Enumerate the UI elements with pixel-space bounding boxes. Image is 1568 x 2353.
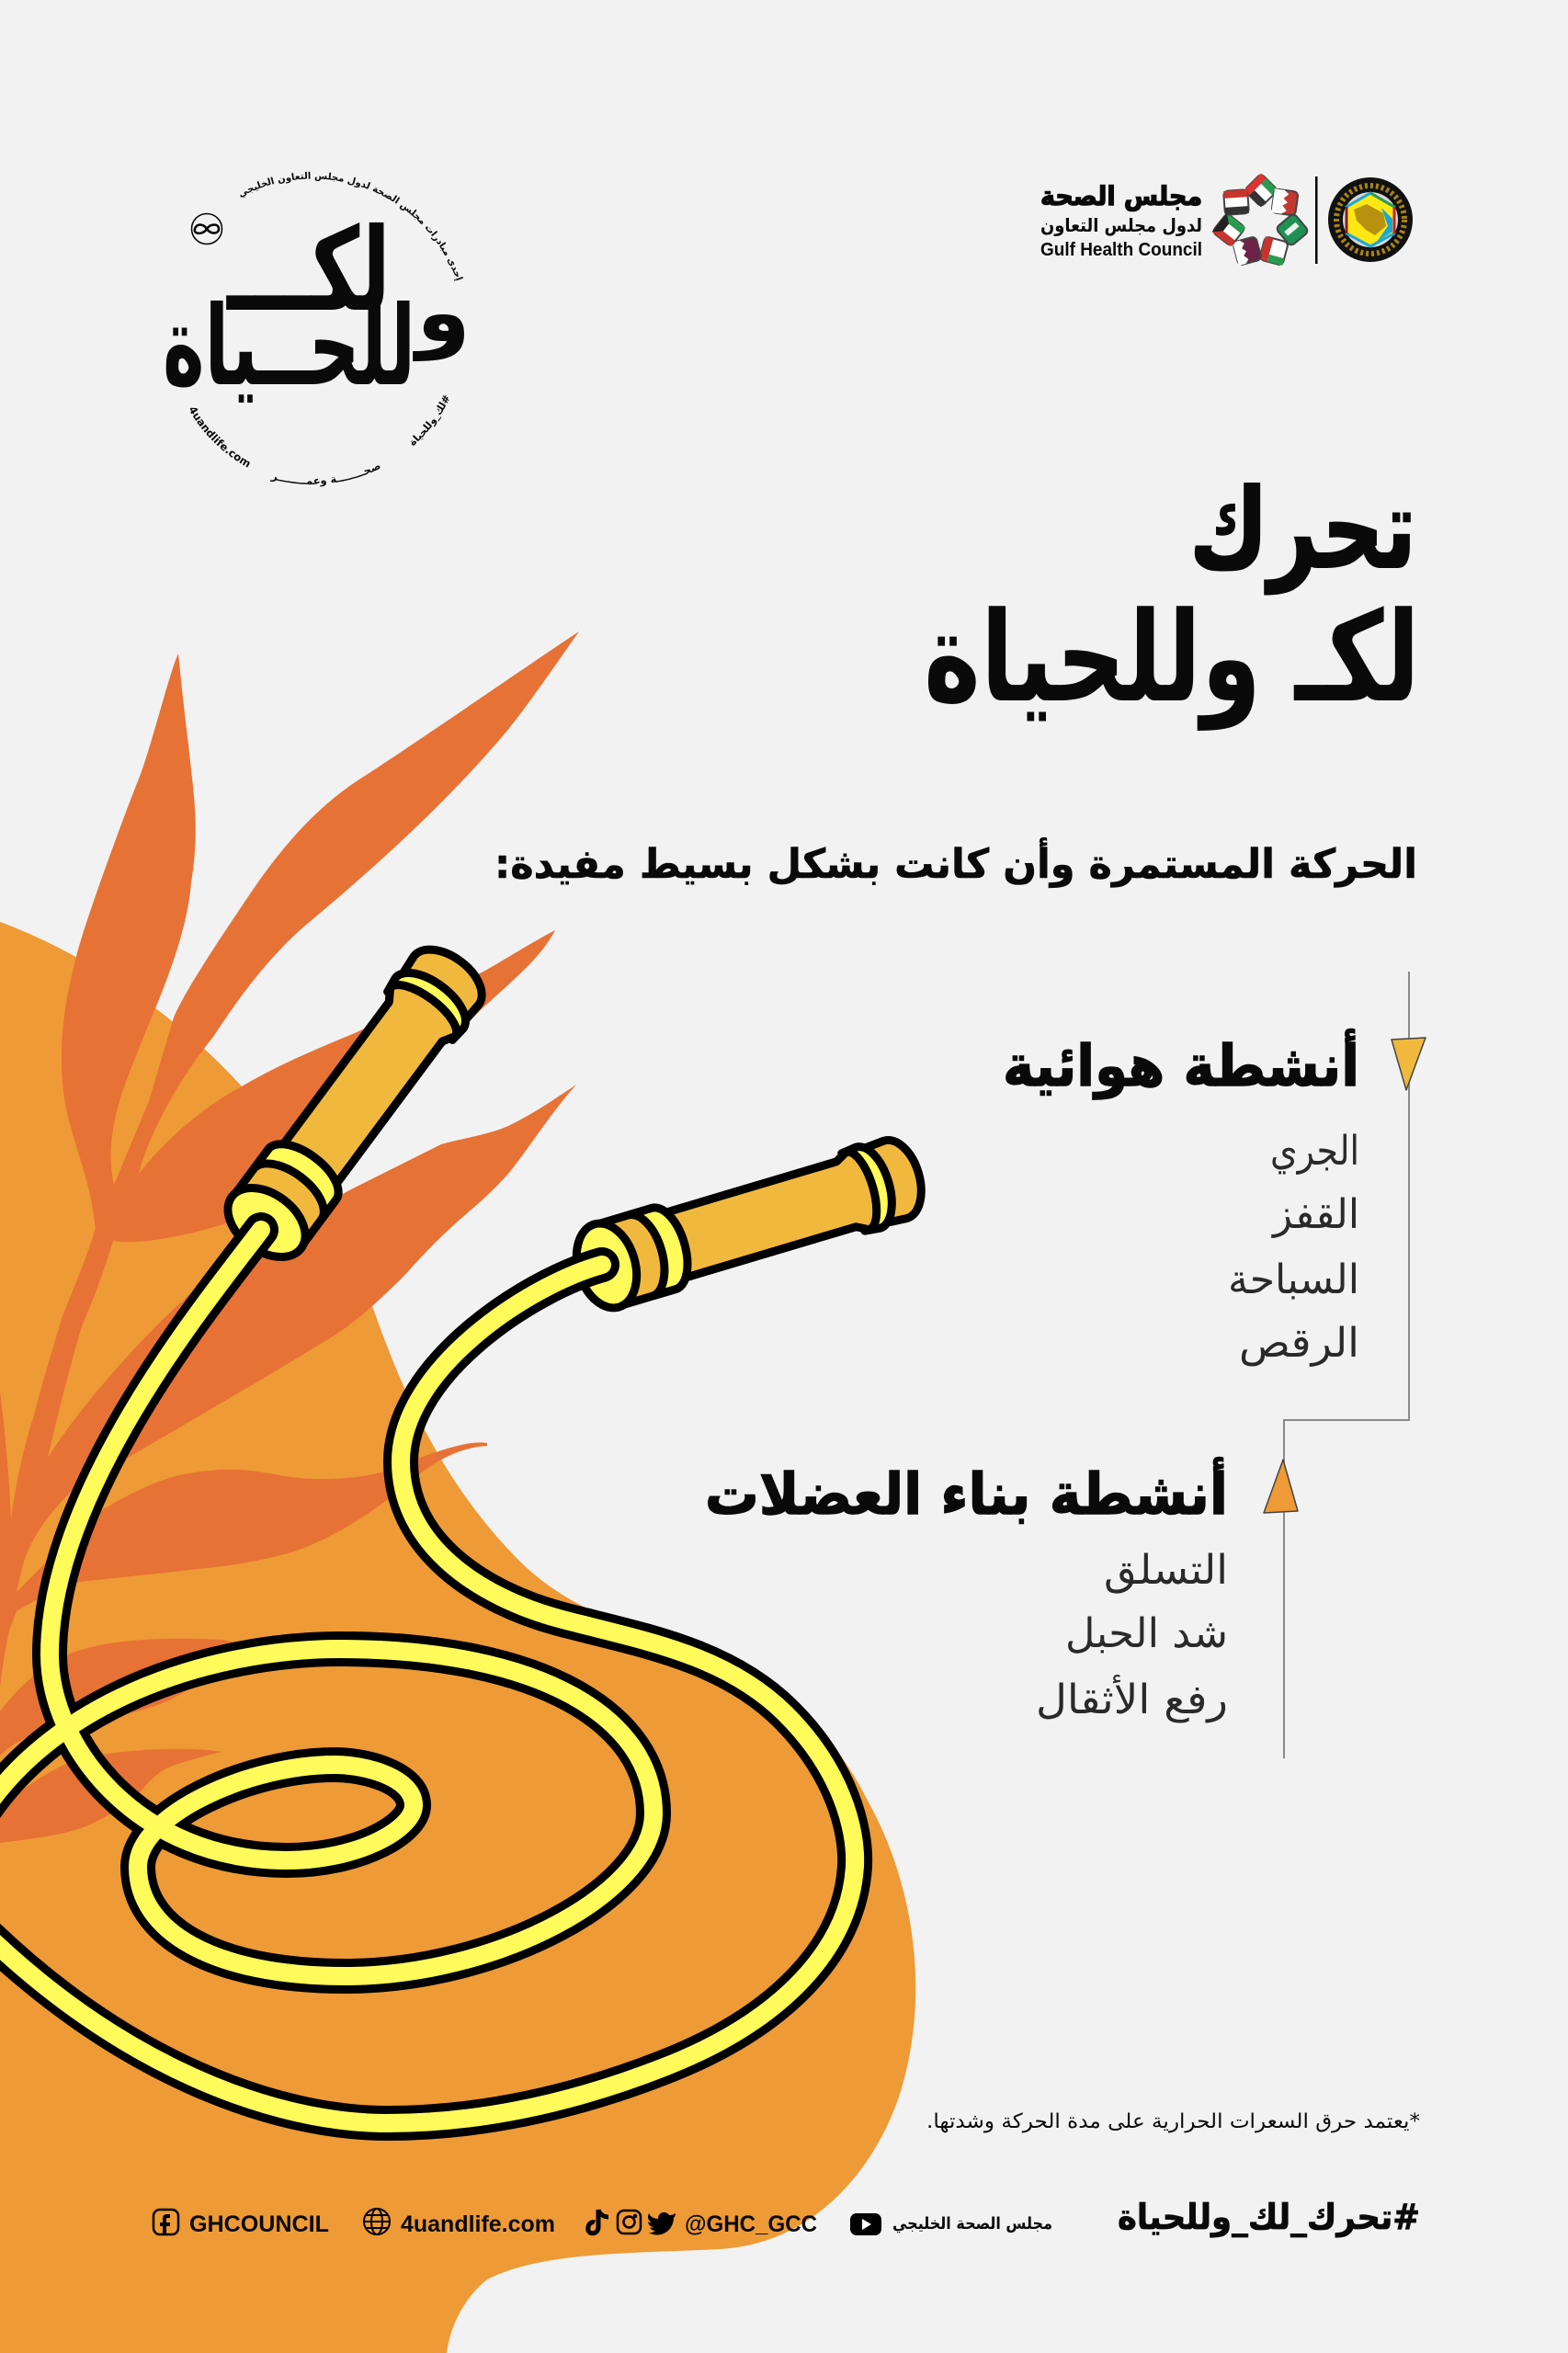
- council logo group: [1040, 174, 1413, 266]
- icon: instagram: [618, 2211, 641, 2234]
- badge: top arc text: إحدى مبادرات مجلس الصحة لدول مجلس التعاون الخليجي: [240, 171, 463, 281]
- illustration: jump rope cord: [0, 1230, 855, 2123]
- campaign badge logo: [163, 171, 471, 487]
- badge: title line one: لكـــ: [225, 203, 391, 337]
- website label: 4uandlife.com: [401, 2211, 555, 2237]
- illustration: right rope handle: [567, 1131, 931, 1315]
- main title: [924, 466, 1420, 732]
- list: aerobic items: [1228, 1128, 1359, 1367]
- facebook label: GHCOUNCIL: [189, 2211, 329, 2237]
- icon: twitter: [648, 2212, 676, 2234]
- footnote: *يعتمد حرق السعرات الحرارية على مدة الحركة وشدتها.: [926, 2110, 1420, 2133]
- main title: لكـ وللحياة: [924, 586, 1420, 732]
- heading: muscle: أنشطة بناء العضلات: [705, 1457, 1228, 1528]
- section: aerobic activities: [1003, 1029, 1359, 1367]
- badge: website arc text: 4uandlife.com: [189, 408, 250, 467]
- list: aerobic items: القفز: [1271, 1191, 1359, 1238]
- list: muscle items: شد الحبل: [1065, 1610, 1228, 1657]
- hashtag: #تحرك_لك_وللحياة: [1118, 2197, 1420, 2238]
- timeline connector line: [1284, 972, 1409, 1758]
- list: muscle items: [1036, 1547, 1228, 1723]
- icon: youtube: [850, 2213, 881, 2235]
- section: muscle building activities: [705, 1457, 1228, 1723]
- list: muscle items: التسلق: [1104, 1547, 1228, 1594]
- youtube channel label: مجلس الصحة الخليجي: [892, 2214, 1052, 2234]
- illustration: left rope handle: [215, 936, 495, 1271]
- footer social row: [153, 2209, 1052, 2237]
- icon: globe: [364, 2209, 390, 2234]
- list: aerobic items: الجري: [1270, 1128, 1359, 1175]
- icon: yellow down triangle: [1392, 1038, 1426, 1090]
- intro sentence: الحركة المستمرة وأن كانت بشكل بسيط مفيدة:: [494, 837, 1417, 888]
- icon: orange up triangle: [1264, 1460, 1298, 1513]
- badge: bottom arc text: صحــــــــة وعمــــــــر: [270, 465, 381, 487]
- badge: infinity icon: [191, 213, 222, 244]
- list: aerobic items: الرقص: [1239, 1320, 1359, 1367]
- list: muscle items: رفع الأثقال: [1036, 1674, 1228, 1723]
- icon: GCC emblem: [1328, 177, 1413, 262]
- badge: title line two, waw: و: [413, 265, 471, 362]
- twitter and instagram handle: @GHC_GCC: [685, 2211, 817, 2237]
- badge: hashtag arc text: #لك_وللحياة: [410, 395, 449, 446]
- heading: aerobic: أنشطة هوائية: [1003, 1029, 1359, 1099]
- icon: seven flags ring: [1212, 174, 1309, 266]
- orange background blob: [0, 922, 915, 2353]
- council name text: [1040, 181, 1202, 260]
- main title: تحرك: [1189, 466, 1416, 594]
- logo divider: [1315, 176, 1318, 264]
- list: aerobic items: السباحة: [1228, 1256, 1359, 1303]
- icon: tiktok: [588, 2210, 608, 2234]
- council name text: مجلس الصحة: [1040, 181, 1202, 211]
- icon: facebook: [153, 2210, 178, 2234]
- illustration: plant leaves: [0, 631, 579, 1843]
- badge: title line two, remainder: للحــياة: [163, 282, 415, 411]
- council name text: لدول مجلس التعاون: [1040, 214, 1202, 236]
- council name text: Gulf Health Council: [1040, 240, 1202, 260]
